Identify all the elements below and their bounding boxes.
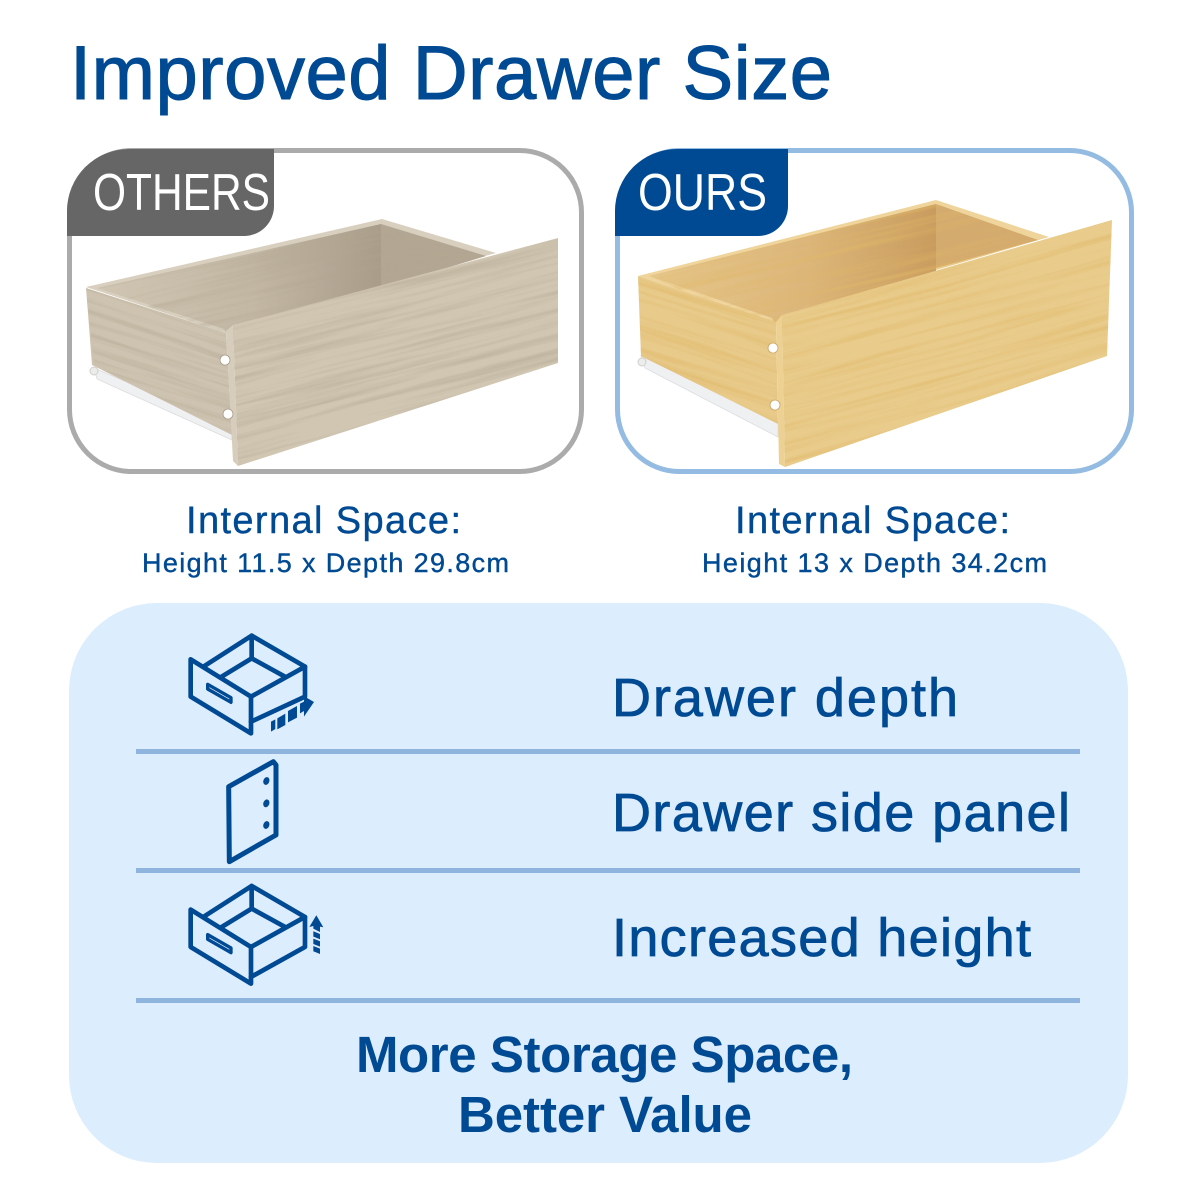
conclusion: Better Value (458, 1086, 752, 1143)
frame: others (70, 150, 582, 472)
divider (136, 749, 1080, 754)
photo: ours drawer (638, 200, 1112, 467)
divider (136, 868, 1080, 873)
caption: others internal space: Height 11.5 x Depth 29.8cm (142, 548, 509, 578)
label: drawer depth: Drawer depth (612, 668, 958, 728)
label: side panel: Drawer side panel (612, 783, 1070, 843)
caption: ours internal space: Height 13 x Depth 34.2cm (702, 548, 1047, 578)
tab: others (67, 149, 274, 236)
label: increased height: Increased height (612, 908, 1031, 968)
photo: others drawer (86, 219, 558, 466)
panel background (69, 603, 1128, 1163)
icon: drawer depth (191, 636, 314, 733)
conclusion (356, 1026, 853, 1143)
panel: ours comparison (615, 148, 1134, 474)
caption: others internal space (142, 500, 509, 578)
caption: ours internal space: Internal Space: (735, 500, 1010, 542)
frame: ours (618, 150, 1132, 472)
tab: ours (615, 149, 788, 236)
tab label: others: OTHERS (93, 164, 270, 222)
icon: side panel (229, 762, 276, 862)
panel: others comparison (67, 148, 584, 474)
conclusion: More Storage Space, (356, 1026, 853, 1083)
title: Improved Drawer Size (70, 31, 832, 116)
caption: ours internal space (702, 500, 1047, 578)
tab label: ours: OURS (638, 164, 767, 222)
caption: others internal space: Internal Space: (186, 500, 461, 542)
icon: increased height (191, 886, 323, 984)
divider (136, 998, 1080, 1003)
panel: benefits (69, 603, 1128, 1163)
